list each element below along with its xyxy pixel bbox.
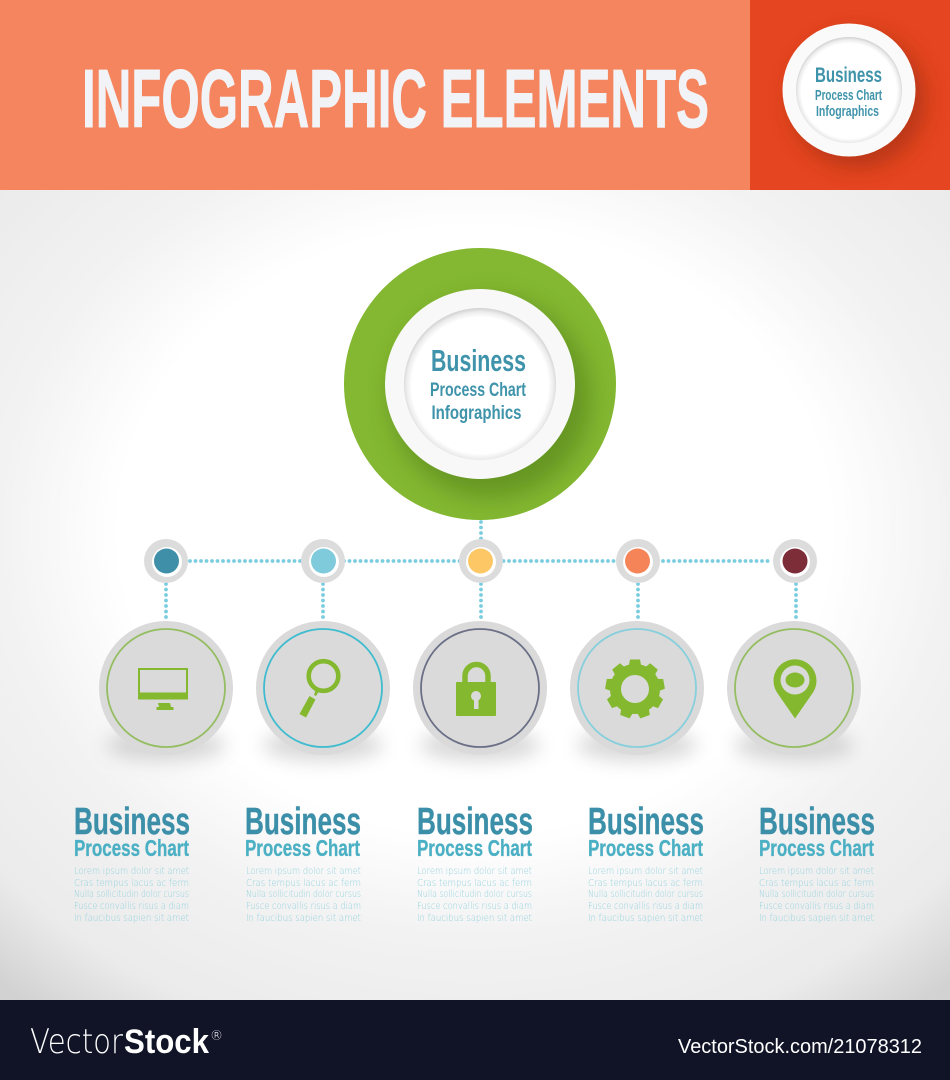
text block 2: Fusce convallis risus a diam <box>246 901 361 912</box>
text block 3: Cras tempus lacus ac ferm <box>417 878 532 889</box>
badge text: Process Chart <box>815 88 882 104</box>
text block 2: Lorem ipsum dolor sit amet <box>246 866 361 877</box>
icon: monitor <box>138 668 188 710</box>
text block 3: Business <box>417 801 533 843</box>
header badge <box>782 24 926 168</box>
text block 5: Process Chart <box>759 835 874 861</box>
node 3 <box>459 539 503 583</box>
text block 3: Nulla sollicitudin dolor cursus <box>417 889 532 900</box>
icon circle: gear <box>570 621 704 761</box>
badge text: Infographics <box>816 104 879 120</box>
text block 1: Process Chart <box>74 835 189 861</box>
text block 5 <box>759 801 875 924</box>
footer logo: ® <box>210 1029 223 1044</box>
text block 5: Cras tempus lacus ac ferm <box>759 878 874 889</box>
icon: lock <box>456 664 496 716</box>
text block 1: Nulla sollicitudin dolor cursus <box>74 889 189 900</box>
header banner <box>0 0 950 190</box>
text block 4: Cras tempus lacus ac ferm <box>588 878 703 889</box>
footer logo <box>30 1022 223 1062</box>
text block 4: In faucibus sapien sit amet <box>588 913 703 924</box>
footer logo: Vector <box>30 1022 123 1062</box>
central text: Business <box>431 343 526 378</box>
badge text <box>815 64 882 120</box>
node 2 <box>301 539 345 583</box>
icon: location pin <box>774 659 817 718</box>
node 1 <box>144 539 188 583</box>
text block 4 <box>588 801 704 924</box>
text block 1: Fusce convallis risus a diam <box>74 901 189 912</box>
footer bar <box>0 1000 950 1080</box>
node 4 <box>616 539 660 583</box>
text block 1 <box>74 801 190 924</box>
text block 4: Lorem ipsum dolor sit amet <box>588 866 703 877</box>
text block 4: Business <box>588 801 704 843</box>
text block 5: In faucibus sapien sit amet <box>759 913 874 924</box>
icon: magnifier <box>300 661 338 718</box>
text block 2: In faucibus sapien sit amet <box>246 913 361 924</box>
text block 3 <box>417 801 533 924</box>
text block 3: In faucibus sapien sit amet <box>417 913 532 924</box>
icon circle: magnifier <box>256 621 390 761</box>
text block 5: Business <box>759 801 875 843</box>
footer url: VectorStock.com/21078312 <box>678 1036 922 1058</box>
text block 4: Nulla sollicitudin dolor cursus <box>588 889 703 900</box>
icon: gear <box>605 660 665 719</box>
text block 3: Lorem ipsum dolor sit amet <box>417 866 532 877</box>
text block 2 <box>245 801 361 924</box>
text block 2: Business <box>245 801 361 843</box>
text block 3: Process Chart <box>417 835 532 861</box>
central green circle <box>344 248 616 520</box>
text block 4: Process Chart <box>588 835 703 861</box>
icon circle: location pin <box>727 621 861 761</box>
central text: Infographics <box>432 402 522 424</box>
icon circle: monitor <box>99 621 233 761</box>
page background <box>0 190 950 1000</box>
connector lines <box>166 522 796 620</box>
text block 5: Nulla sollicitudin dolor cursus <box>759 889 874 900</box>
text block 2: Nulla sollicitudin dolor cursus <box>246 889 361 900</box>
text block 1: Business <box>74 801 190 843</box>
footer logo: Stock <box>124 1023 209 1061</box>
text block 1: Lorem ipsum dolor sit amet <box>74 866 189 877</box>
icon circle: lock <box>413 621 547 761</box>
text block 2: Process Chart <box>245 835 360 861</box>
badge text: Business <box>815 64 882 87</box>
text block 1: In faucibus sapien sit amet <box>74 913 189 924</box>
node 5 <box>773 539 817 583</box>
text block 5: Fusce convallis risus a diam <box>759 901 874 912</box>
central text <box>430 343 526 424</box>
text block 5: Lorem ipsum dolor sit amet <box>759 866 874 877</box>
text block 2: Cras tempus lacus ac ferm <box>246 878 361 889</box>
text block 4: Fusce convallis risus a diam <box>588 901 703 912</box>
central text: Process Chart <box>430 379 526 401</box>
text block 1: Cras tempus lacus ac ferm <box>74 878 189 889</box>
text block 3: Fusce convallis risus a diam <box>417 901 532 912</box>
